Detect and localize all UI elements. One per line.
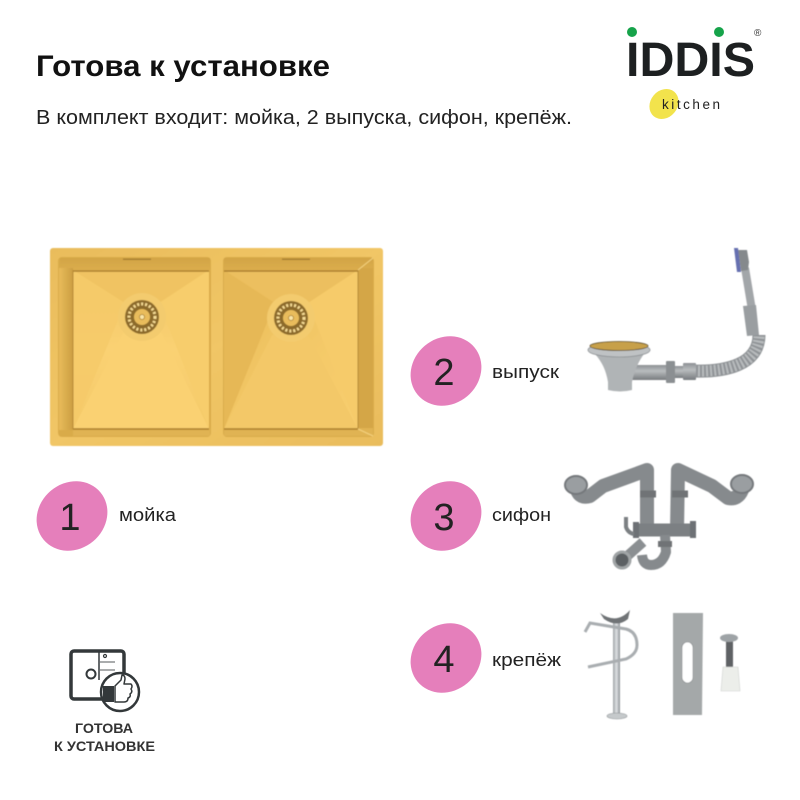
bracket plate [673,613,703,715]
fasteners picture [585,610,740,719]
number 1: 1 [59,497,81,539]
plastic anchor [721,667,740,691]
label выпуск: выпуск [492,362,559,382]
icon: thumb cuff [103,686,114,702]
logo green dot left [627,27,637,37]
icon: drain ring [86,670,96,678]
overflow tip [738,250,749,271]
overflow blue gasket [734,248,741,272]
left drain [118,293,166,341]
horizontal pipe [630,365,666,380]
label крепёж: крепёж [492,650,561,670]
pipe coupling [683,363,696,380]
number 3: 3 [433,497,455,539]
overflow connector [743,305,759,336]
icon: thumb up [115,675,132,702]
right inlet cup [731,475,753,493]
logo wordmark: IDDIS [626,34,755,87]
icon: ticks [100,662,115,670]
icon: divider [98,651,100,680]
title: Готова к установке [36,50,330,83]
subtitle: В комплект входит: мойка, 2 выпуска, сифон, крепёж. [36,107,572,129]
sink rim [50,248,383,446]
left arm [577,470,647,530]
icon caption line 1: ГОТОВА [75,720,133,736]
right bowl [223,257,374,437]
sink photo [50,248,383,446]
clamp bolt [613,620,620,716]
flange [588,343,650,357]
crossbar [636,524,694,536]
logo kitchen word: kitchen [662,97,720,112]
hook [626,517,634,534]
crossbar ends [636,521,693,538]
outlet adapter [624,542,643,559]
item 3: сифон [396,467,551,565]
icon caption line 2: К УСТАНОВКЕ [54,738,155,754]
corrugated hose [694,335,759,371]
logo yellow blob [643,83,685,125]
bolt head [607,713,627,719]
pipe nut [666,361,675,383]
number 2: 2 [433,352,455,394]
label сифон: сифон [492,505,551,525]
item 4: крепёж [396,609,561,707]
pipe section [675,366,684,378]
item 2: выпуск [396,322,559,420]
right arm [677,470,742,530]
trap [642,535,666,565]
icon: badge circle [101,673,139,711]
strainer body [595,354,644,392]
screw head [720,634,738,642]
item 1: мойка [22,467,177,565]
right drain [267,294,315,342]
badge 1 [22,467,122,565]
badge 4 [396,609,496,707]
wire clip [585,623,637,667]
plate slot [682,642,693,683]
icon: small ring [104,654,106,658]
collars [640,490,688,498]
icon: cabinet outline [71,651,124,699]
siphon picture [565,470,753,568]
left bowl [58,257,211,437]
badge 2 [396,322,496,420]
label мойка: мойка [119,505,177,525]
number 4: 4 [433,639,455,681]
badge 3 [396,467,496,565]
logo green dot right [714,27,724,37]
trap collar [658,541,672,547]
logo: iddis kitchen [626,27,762,125]
left inlet cup [565,476,587,494]
gold plate [590,342,648,350]
registered mark: ® [754,28,762,39]
screw shaft [726,640,733,670]
clamp cup [600,610,630,624]
overflow tube [745,268,752,310]
ready to install icon [54,651,155,754]
outlet end [614,552,630,568]
drain assembly picture [588,248,759,392]
